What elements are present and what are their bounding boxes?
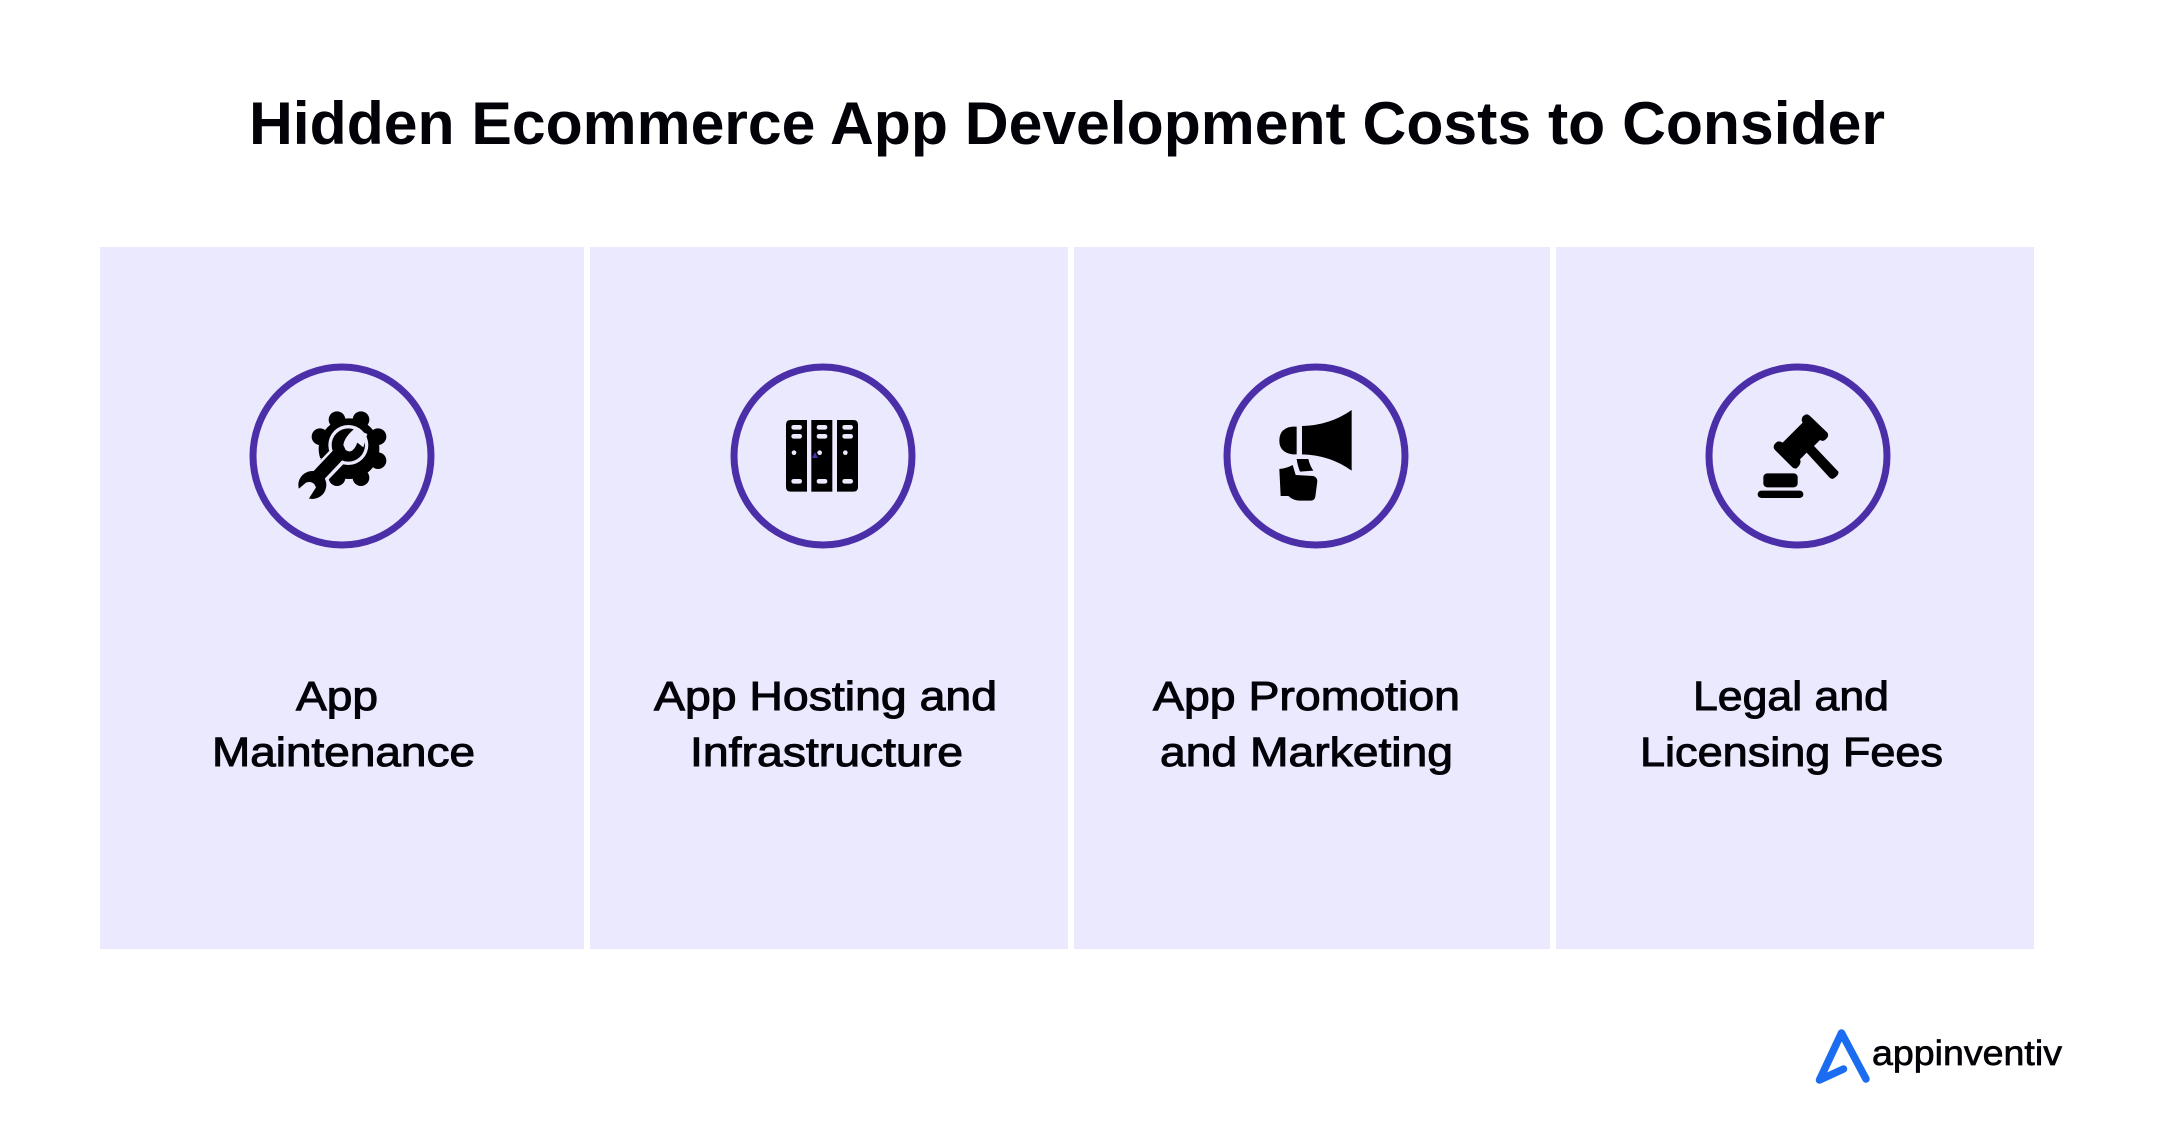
panel: app promotion and marketing bbox=[1074, 247, 1550, 949]
label: app promotion and marketing bbox=[1153, 673, 1460, 775]
icon: server racks bbox=[734, 367, 912, 545]
panel: app hosting and infrastructure bbox=[590, 247, 1068, 949]
logo: appinventiv bbox=[1820, 1033, 2063, 1080]
label: app hosting and infrastructure bbox=[654, 673, 997, 775]
icon: logo mark bbox=[1820, 1033, 1866, 1080]
label: legal and licensing fees: Legal and bbox=[1693, 673, 1889, 719]
panel: legal and licensing fees bbox=[1556, 247, 2034, 949]
label: app promotion and marketing: and Marketing bbox=[1160, 729, 1453, 775]
label: app maintenance bbox=[212, 673, 475, 775]
label: app maintenance: Maintenance bbox=[212, 729, 475, 775]
logo wordmark: appinventiv bbox=[1872, 1034, 2063, 1073]
icon: megaphone bbox=[1227, 367, 1405, 545]
label: legal and licensing fees bbox=[1640, 673, 1943, 775]
title: Hidden Ecommerce App Development Costs to Consider bbox=[249, 90, 1885, 157]
icon: gear and wrench bbox=[253, 367, 431, 545]
label: app promotion and marketing: App Promotion bbox=[1153, 673, 1460, 719]
label: app hosting and infrastructure: Infrastructure bbox=[690, 729, 963, 775]
panel: app maintenance bbox=[100, 247, 584, 949]
label: app maintenance: App bbox=[296, 673, 378, 719]
label: app hosting and infrastructure: App Hosting and bbox=[654, 673, 997, 719]
icon: gavel bbox=[1709, 367, 1887, 545]
label: legal and licensing fees: Licensing Fees bbox=[1640, 729, 1943, 775]
